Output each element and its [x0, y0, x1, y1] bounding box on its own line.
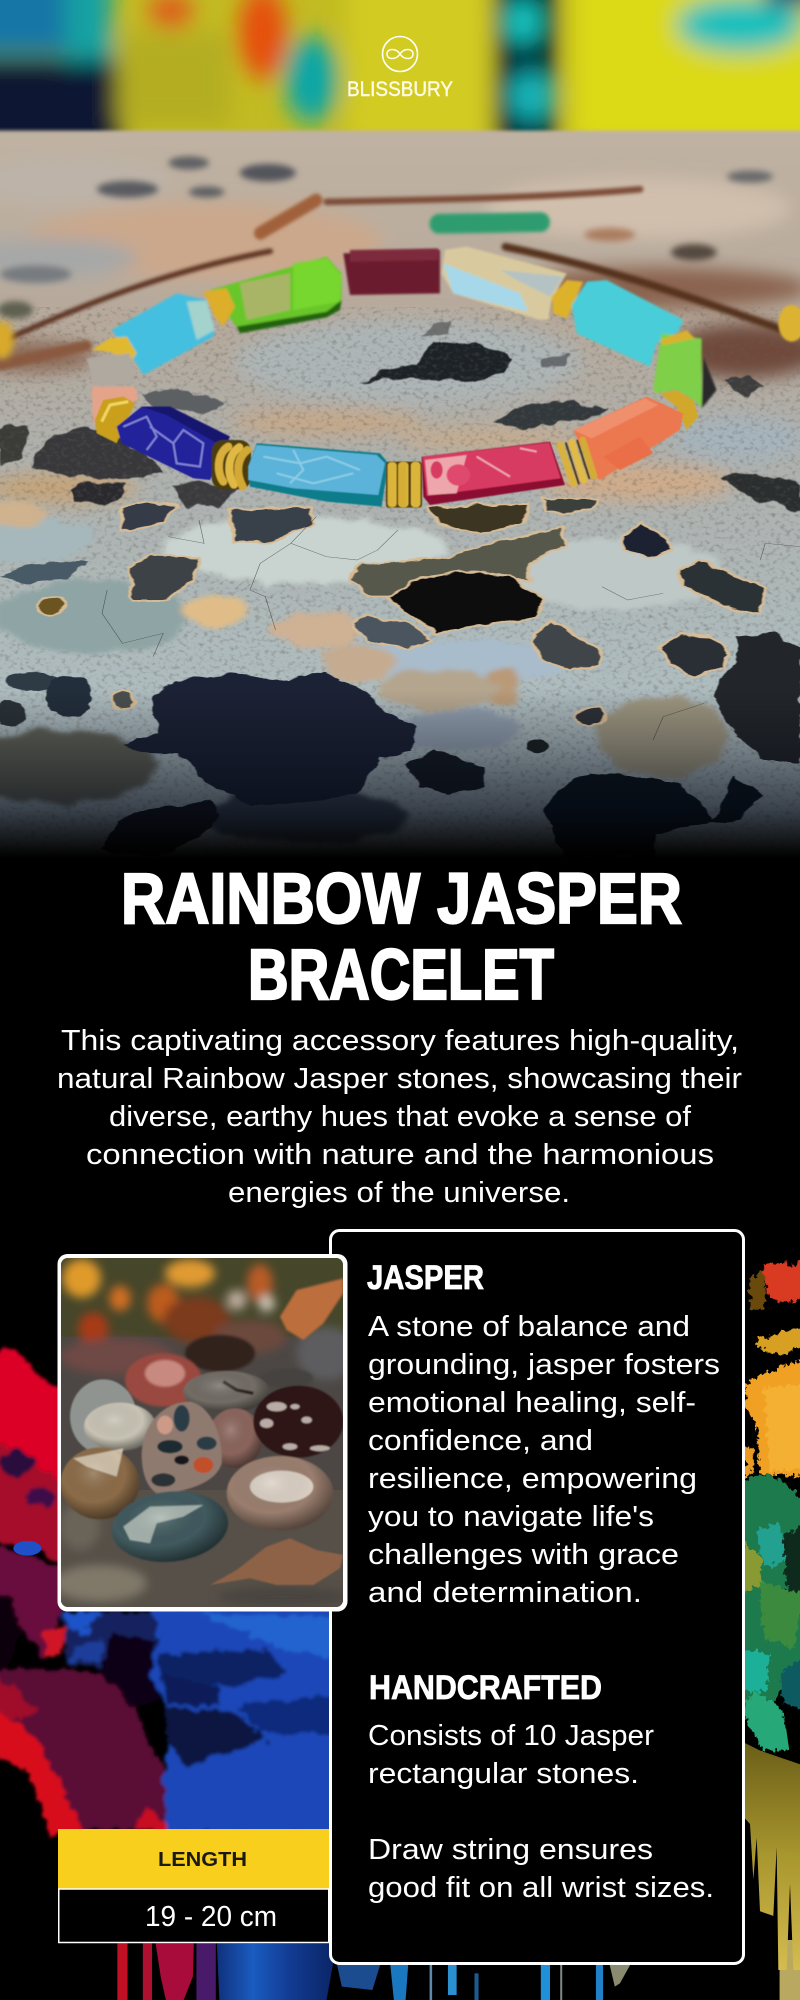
- left half of bracelet: [87, 248, 440, 508]
- intro paragraph: [57, 1025, 742, 1209]
- paint splash: bottom drips: [117, 1940, 800, 2000]
- surface grain: [0, 307, 800, 861]
- length value: [59, 1889, 329, 1942]
- jasper description: challenges with grace: [368, 1539, 679, 1571]
- gold end cap: left: [0, 321, 14, 359]
- hero photo: bracelet on weathered stone: [0, 0, 800, 898]
- bottom fade to black: [0, 690, 800, 858]
- title: RAINBOW JASPER: [121, 860, 682, 939]
- leaf: top right: [280, 1278, 343, 1340]
- pale paint and tan flakes: [0, 500, 730, 843]
- jasper description: confidence, and: [368, 1425, 593, 1457]
- blurred far stones: [87, 248, 440, 427]
- tan stone: [61, 1447, 139, 1519]
- jasper description: resilience, empowering: [368, 1463, 697, 1495]
- pink-brown stone: [208, 1408, 262, 1468]
- handcrafted description: Consists of 10 Jasper: [368, 1720, 654, 1752]
- intro paragraph: connection with nature and the harmonious: [86, 1139, 714, 1171]
- handcrafted description: [368, 1720, 714, 1904]
- jasper description: grounding, jasper fosters: [368, 1349, 720, 1381]
- length value: 19 - 20 cm: [145, 1901, 277, 1933]
- heading: Handcrafted: HANDCRAFTED: [369, 1669, 602, 1707]
- drawstring cord: [0, 189, 781, 365]
- title: BRACELET: [248, 936, 554, 1015]
- logo wordmark: BLISSBURY: [347, 78, 453, 101]
- mottled jasper stone: [142, 1402, 222, 1493]
- logo: Blissbury: [347, 36, 453, 101]
- jasper description: [368, 1311, 720, 1609]
- blurred far stones: [442, 247, 800, 408]
- mid-surface pits: [0, 321, 800, 510]
- jasper stones photo card: [53, 1254, 357, 1612]
- blurred autumn leaves: [53, 1259, 357, 1607]
- leaf: bottom right: [210, 1538, 343, 1585]
- jasper description: A stone of balance and: [368, 1311, 690, 1343]
- paint splash: left: [0, 1348, 340, 1837]
- stone surface: [0, 131, 800, 898]
- blue stone: [248, 443, 388, 507]
- back stones: [125, 1335, 313, 1407]
- right half of bracelet: [398, 247, 800, 507]
- gold spacer at lime stone: [660, 390, 698, 430]
- heading: Jasper: JASPER: [367, 1259, 484, 1297]
- jasper description: emotional healing, self-: [368, 1387, 696, 1419]
- near stones and spacers: [95, 397, 422, 508]
- streaked stone: [183, 1371, 270, 1412]
- pale stones: [70, 1379, 156, 1454]
- jasper description: you to navigate life's: [368, 1501, 654, 1533]
- bracelet: [0, 189, 800, 508]
- intro paragraph: diverse, earthy hues that evoke a sense of: [109, 1101, 692, 1133]
- intro paragraph: energies of the universe.: [228, 1177, 570, 1209]
- ring spacer tail: [398, 462, 420, 507]
- red stone: [422, 442, 565, 505]
- speckled maroon stone: [253, 1386, 343, 1458]
- soft far-surface spots: [0, 156, 773, 319]
- intro paragraph: natural Rainbow Jasper stones, showcasing their: [57, 1063, 742, 1095]
- lower stone: peeling paint and pits: [0, 498, 800, 857]
- orange stone: [573, 397, 683, 480]
- teal stone: [108, 1486, 232, 1568]
- length header: [58, 1829, 329, 1889]
- near gold spacers: [95, 397, 135, 443]
- light speckled stone: [227, 1456, 333, 1531]
- handcrafted description: rectangular stones.: [368, 1758, 639, 1790]
- ring spacers by navy stone: [212, 440, 251, 489]
- length header: LENGTH: [158, 1849, 247, 1871]
- ring spacers by orange stone: [560, 440, 594, 483]
- stones pile: [61, 1335, 343, 1585]
- paint splash: right: [742, 1264, 800, 1970]
- info panel: [330, 1230, 744, 1964]
- navy stone: [117, 407, 230, 480]
- surface cracks: [102, 517, 800, 740]
- handcrafted description: good fit on all wrist sizes.: [368, 1872, 714, 1904]
- length spec box: [58, 1829, 329, 1942]
- jasper description: and determination.: [368, 1577, 642, 1609]
- dark pits: [37, 498, 765, 754]
- title: [121, 860, 682, 1015]
- logo ring with infinity mark: [382, 36, 418, 72]
- intro paragraph: This captivating accessory features high-quality,: [61, 1025, 739, 1057]
- near stones and spacers: [398, 390, 698, 507]
- handcrafted description: Draw string ensures: [368, 1834, 653, 1866]
- ring spacers by blue stone: [386, 462, 422, 508]
- blurred graffiti backdrop: [0, 0, 800, 134]
